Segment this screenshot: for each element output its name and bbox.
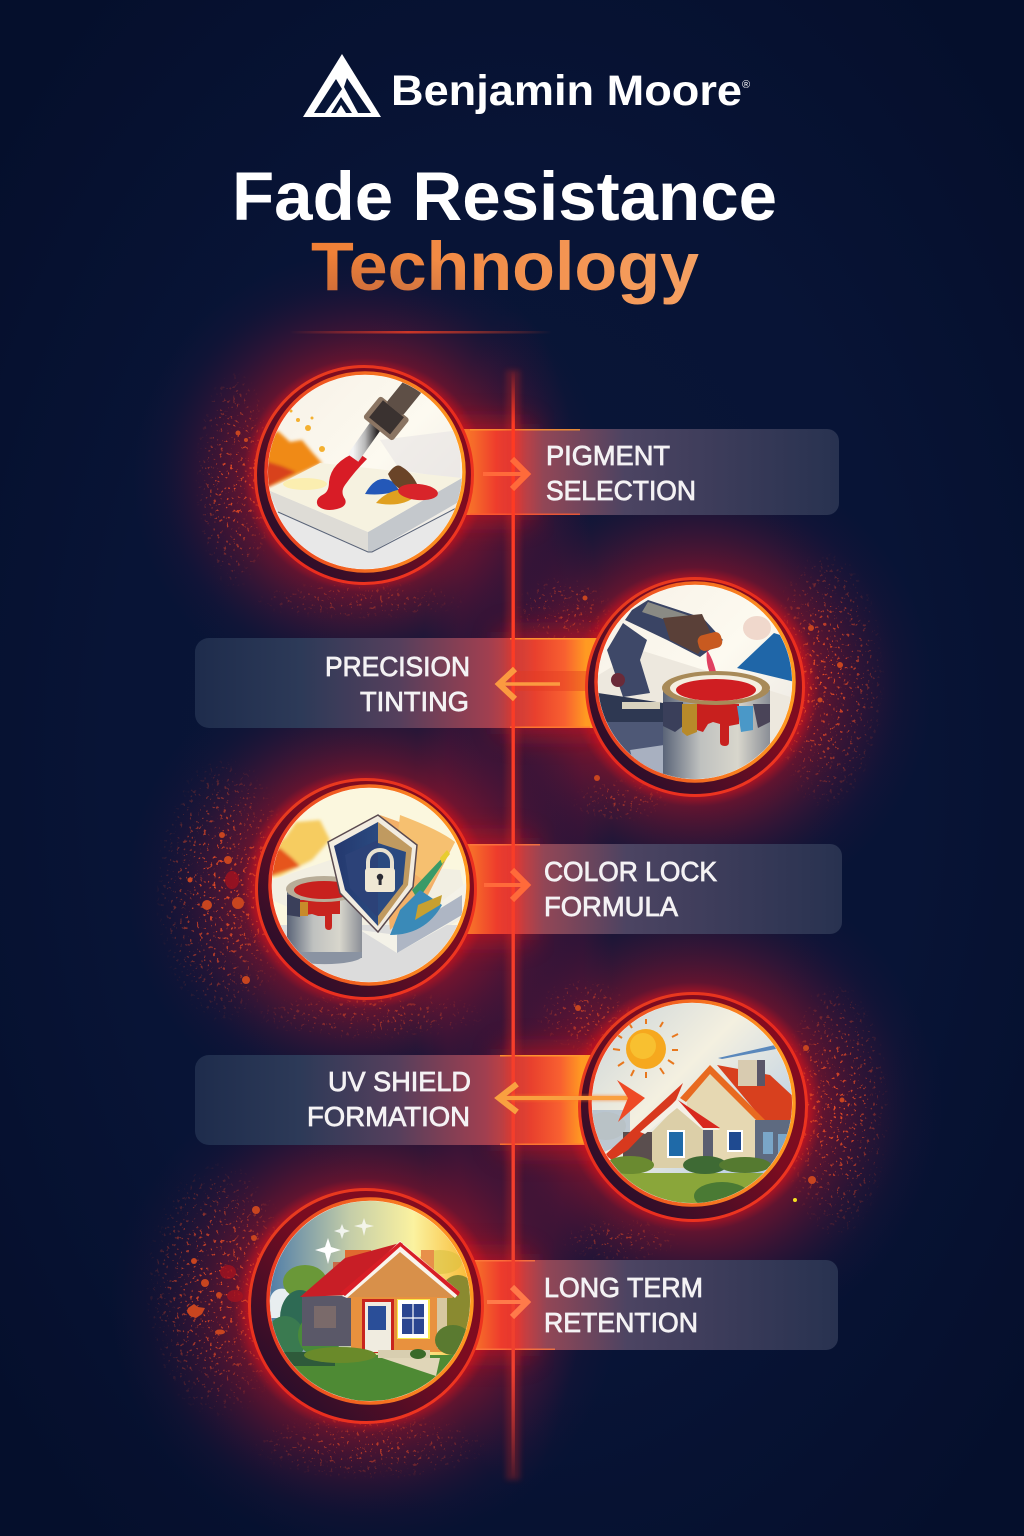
illustration: dropper and pigments bbox=[268, 375, 462, 569]
icon ring bbox=[256, 366, 472, 584]
arrow bbox=[487, 1287, 527, 1317]
panel: precision tinting: TINTING bbox=[360, 686, 469, 717]
panel: pigment selection bbox=[450, 429, 839, 515]
panel: precision tinting bbox=[195, 638, 620, 728]
logo wordmark: Benjamin Moore bbox=[391, 67, 742, 115]
title line 1: Fade Resistance bbox=[232, 158, 777, 235]
icon ring bbox=[256, 780, 476, 998]
illustration: robotic tinting arm and paint can bbox=[598, 585, 792, 779]
panel: uv shield formation: UV SHIELD bbox=[328, 1066, 471, 1097]
step 2: precision tinting bbox=[499, 578, 804, 796]
panel: long term retention: RETENTION bbox=[544, 1307, 698, 1338]
arrow bbox=[484, 870, 527, 900]
panel: long term retention: LONG TERM bbox=[544, 1272, 703, 1303]
step 4: uv shield formation bbox=[499, 994, 806, 1220]
panel: precision tinting: PRECISION bbox=[325, 651, 470, 682]
title line 2: Technology bbox=[311, 228, 699, 305]
registered mark: ® bbox=[742, 79, 750, 91]
title divider glow bbox=[290, 331, 552, 334]
arrow bbox=[483, 459, 527, 489]
panel: color lock formula: FORMULA bbox=[544, 891, 678, 922]
arrow bbox=[499, 669, 560, 699]
panel: pigment selection: PIGMENT bbox=[546, 440, 670, 471]
illustration: shield, lock and paint can bbox=[272, 788, 466, 982]
logo: Benjamin Moore bbox=[303, 54, 750, 117]
panel: long term retention bbox=[455, 1260, 838, 1350]
paint speckle particles bbox=[148, 374, 888, 1478]
central vertical spine bbox=[506, 370, 520, 1480]
icon ring bbox=[586, 578, 804, 796]
icon: triangle mountain mark bbox=[303, 54, 381, 117]
icon ring bbox=[250, 1190, 482, 1422]
illustration: sun and house bbox=[586, 1000, 797, 1210]
panel: uv shield formation bbox=[195, 1055, 615, 1145]
title bbox=[232, 158, 777, 305]
panel: color lock formula: COLOR LOCK bbox=[544, 856, 717, 887]
step 3: color lock formula bbox=[256, 780, 527, 998]
step 5: long term retention bbox=[250, 1190, 527, 1422]
panel: uv shield formation: FORMATION bbox=[307, 1101, 470, 1132]
panel: color lock formula bbox=[450, 844, 842, 934]
red glows behind steps bbox=[111, 250, 943, 1536]
arrow: double headed bbox=[499, 1080, 645, 1122]
panel: pigment selection: SELECTION bbox=[546, 475, 696, 506]
icon ring bbox=[580, 994, 806, 1220]
illustration: preserved house bbox=[270, 1201, 470, 1401]
step 1: pigment selection bbox=[256, 366, 527, 584]
